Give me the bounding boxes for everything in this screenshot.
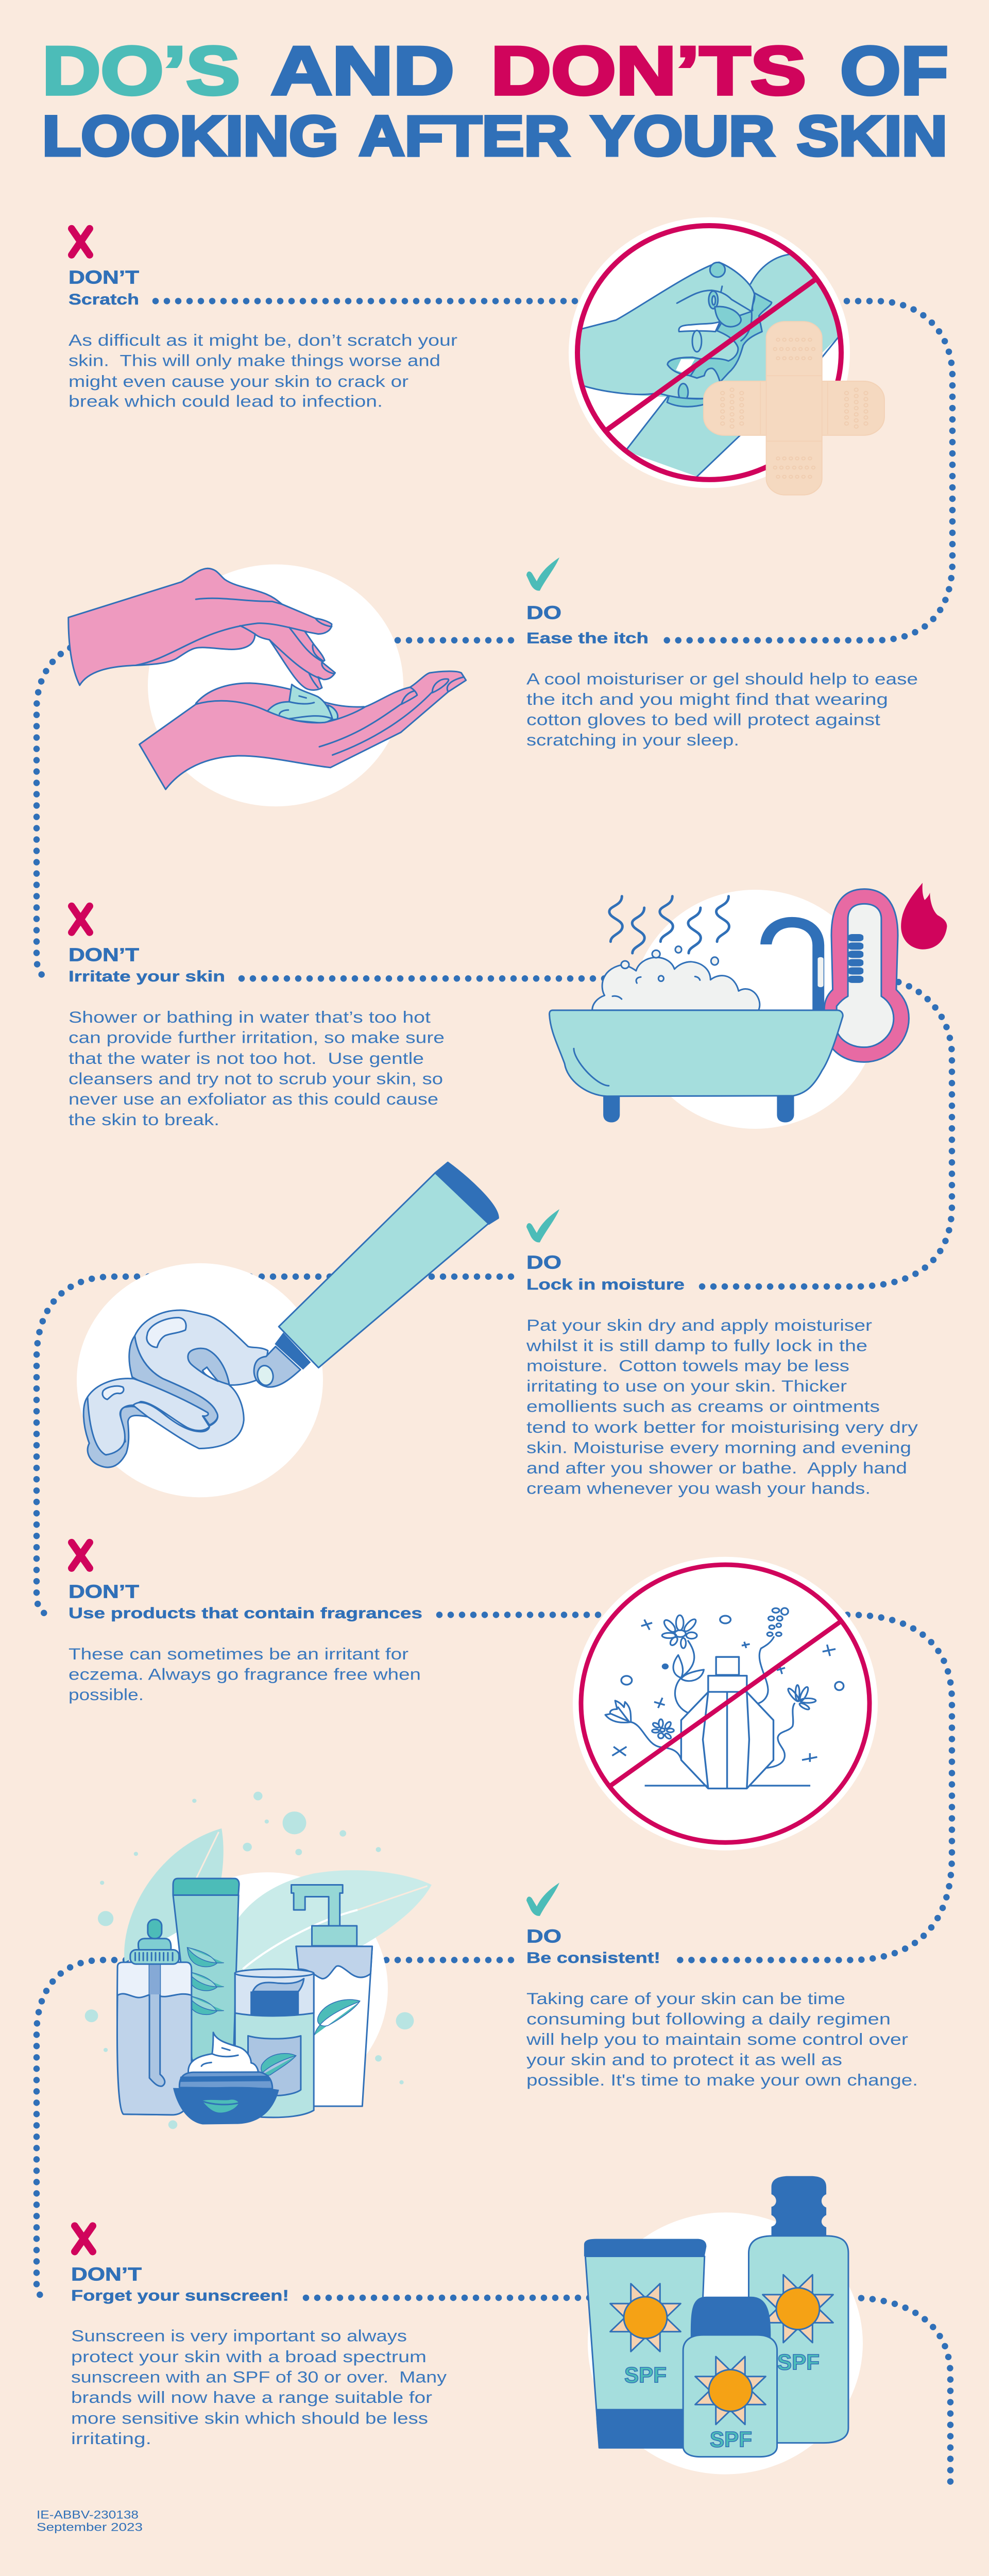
- title: [42, 32, 948, 167]
- perfume bottle: [645, 1657, 810, 1788]
- body text: whilst it is still damp to fully lock in the: [526, 1336, 867, 1354]
- icon: cross: [75, 2226, 93, 2251]
- body text: more sensitive skin which should be less: [71, 2409, 428, 2427]
- body text: protect your skin with a broad spectrum: [71, 2348, 427, 2366]
- sparkle marks: [612, 1616, 844, 1762]
- body text: possible. It's time to make your own change.: [526, 2071, 918, 2089]
- title: YOUR: [591, 104, 775, 167]
- body text: eczema. Always go fragrance free when: [69, 1665, 421, 1683]
- title: LOOKING: [42, 104, 338, 167]
- illustration: sunscreen bottles: [584, 2176, 863, 2475]
- icon: flame: [901, 883, 947, 950]
- heading: do: DO: [526, 1925, 561, 1947]
- body text: consuming but following a daily regimen: [526, 2010, 891, 2028]
- body text: [71, 2327, 447, 2448]
- panel: don't use fragrances: [69, 1543, 422, 1704]
- front bottle: SPF: [710, 2428, 752, 2452]
- panel: don't irritate: [69, 906, 445, 1129]
- dotted connector: moisture to fragrances: [37, 1277, 511, 1614]
- dotted connector: fragrances to consistent: [439, 1615, 952, 1960]
- bubbles and foam: [592, 946, 760, 1010]
- back bottle: [748, 2176, 848, 2443]
- title: DO’S: [42, 32, 240, 109]
- thermometer: [824, 889, 909, 1062]
- body text: tend to work better for moisturising very dry: [526, 1418, 918, 1436]
- tube body: [279, 1162, 498, 1368]
- bath: [550, 1010, 843, 1123]
- title: AFTER: [359, 104, 570, 167]
- body text: break which could lead to infection.: [69, 392, 383, 410]
- illustration: cream squeezed from tube: [77, 1162, 498, 1497]
- body text: will help you to maintain some control over: [526, 2030, 908, 2048]
- icon: cross: [72, 1543, 90, 1568]
- dotted connector: consistent to sunscreen: [37, 1960, 511, 2298]
- footer reference: September 2023: [37, 2521, 143, 2533]
- cream bowl: [173, 2032, 279, 2125]
- body text: irritating.: [71, 2429, 151, 2448]
- heading: don't: DON’T: [69, 266, 139, 287]
- body text: cotton gloves to bed will protect against: [526, 710, 880, 728]
- footer reference: [37, 2509, 143, 2533]
- panel: don't forget sunscreen: [71, 2226, 447, 2448]
- icon: cross: [72, 906, 90, 933]
- body text: scratching in your sleep.: [526, 731, 739, 749]
- body text: [69, 331, 457, 410]
- heading: don't: DON’T: [69, 944, 139, 965]
- body text: emollients such as creams or ointments: [526, 1397, 880, 1416]
- body text: might even cause your skin to crack or: [69, 372, 408, 391]
- body text: cleansers and try not to scrub your skin, so: [69, 1070, 443, 1088]
- body text: the itch and you might find that wearing: [526, 690, 888, 708]
- steam: [609, 896, 729, 953]
- jar: [235, 1969, 314, 2117]
- tap: [760, 917, 824, 1010]
- title: AND: [271, 32, 454, 109]
- body text: possible.: [69, 1686, 144, 1704]
- body text: can provide further irritation, so make sure: [69, 1028, 445, 1046]
- subheading: forget your sunscreen: Forget your sunscreen!: [71, 2287, 289, 2304]
- body text: skin. This will only make things worse and: [69, 351, 440, 369]
- icon: tick: [526, 1883, 559, 1916]
- body text: A cool moisturiser or gel should help to ease: [526, 670, 918, 688]
- dropper bottle: [117, 1920, 192, 2115]
- illustration: perfume bottle prohibited: [573, 1557, 878, 1851]
- body text: moisture. Cotton towels may be less: [526, 1357, 849, 1375]
- back bottle: SPF: [777, 2350, 820, 2375]
- subheading: use products: Use products that contain fragrances: [69, 1605, 422, 1622]
- subheading: be consistent: Be consistent!: [526, 1950, 660, 1967]
- lower hand: [140, 671, 466, 789]
- body text: Shower or bathing in water that’s too hot: [69, 1008, 431, 1026]
- body text: and after you shower or bathe. Apply hand: [526, 1459, 907, 1477]
- body text: never use an exfoliator as this could cause: [69, 1090, 438, 1108]
- heading: don't: DON’T: [71, 2263, 142, 2284]
- dotted connector: irritate to moisture: [242, 978, 952, 1286]
- illustration: scratching arm prohibited with plaster: [569, 217, 884, 495]
- title: SKIN: [797, 104, 947, 167]
- icon: cross: [72, 229, 90, 255]
- body text: [526, 670, 918, 749]
- icon: plaster: [704, 321, 884, 495]
- dotted connector: scratch to ease the itch: [156, 301, 952, 640]
- illustration: skincare products: [85, 1792, 432, 2129]
- dotted connector: sunscreen to end: [306, 2298, 950, 2489]
- leaves behind: [124, 1828, 432, 1976]
- icon: tick: [526, 557, 559, 591]
- splash dots: [85, 1792, 414, 2129]
- subheading: scratch: Scratch: [69, 291, 139, 308]
- body text: irritating to use on your skin. Thicker: [526, 1377, 847, 1395]
- pump bottle: [292, 1885, 372, 2106]
- body text: that the water is not too hot. Use gentle: [69, 1049, 424, 1067]
- cream and nozzle: [83, 1310, 311, 1467]
- sunscreen tube: [584, 2239, 706, 2449]
- body text: sunscreen with an SPF of 30 or over. Many: [71, 2368, 447, 2386]
- illustration: hands with moisturiser: [69, 564, 466, 806]
- title: DON’TS: [491, 32, 806, 109]
- subheading: irritate your skin: Irritate your skin: [69, 968, 225, 985]
- subheading: lock in moisture: Lock in moisture: [526, 1276, 685, 1293]
- heading: do: DO: [526, 1251, 561, 1273]
- illustration: hot bath with thermometer: [550, 883, 947, 1129]
- body text: the skin to break.: [69, 1111, 219, 1129]
- body text: Sunscreen is very important so always: [71, 2327, 407, 2345]
- body text: [69, 1008, 445, 1129]
- heading: do: DO: [526, 602, 561, 623]
- panel: do lock in moisture: [526, 1209, 918, 1497]
- body text: [69, 1645, 421, 1704]
- panel: do be consistent: [526, 1883, 918, 2089]
- icon: tick: [526, 1209, 559, 1243]
- tall tube: [173, 1878, 239, 2060]
- panel: don't scratch: [69, 229, 457, 410]
- body text: As difficult as it might be, don’t scratch your: [69, 331, 457, 349]
- front bottle: [683, 2297, 777, 2457]
- body text: your skin and to protect it as well as: [526, 2050, 842, 2069]
- upper hand: [69, 568, 335, 690]
- body text: These can sometimes be an irritant for: [69, 1645, 408, 1663]
- body text: [526, 1316, 918, 1497]
- footer reference: IE-ABBV-230138: [37, 2509, 139, 2521]
- panel: do ease the itch: [526, 557, 918, 749]
- sunscreen tube: SPF: [624, 2363, 667, 2387]
- dotted connector: ease the itch to irritate: [37, 640, 511, 978]
- body text: brands will now have a range suitable for: [71, 2388, 432, 2406]
- heading: don't: DON’T: [69, 1581, 139, 1602]
- body text: [526, 1990, 918, 2089]
- title: OF: [840, 32, 948, 109]
- background circle: [147, 1872, 388, 2105]
- body text: skin. Moisturise every morning and evening: [526, 1438, 911, 1456]
- subheading: ease the itch: Ease the itch: [526, 630, 649, 647]
- body text: Taking care of your skin can be time: [526, 1990, 845, 2008]
- body text: Pat your skin dry and apply moisturiser: [526, 1316, 872, 1334]
- flowers: [605, 1608, 816, 1768]
- body text: cream whenever you wash your hands.: [526, 1479, 871, 1497]
